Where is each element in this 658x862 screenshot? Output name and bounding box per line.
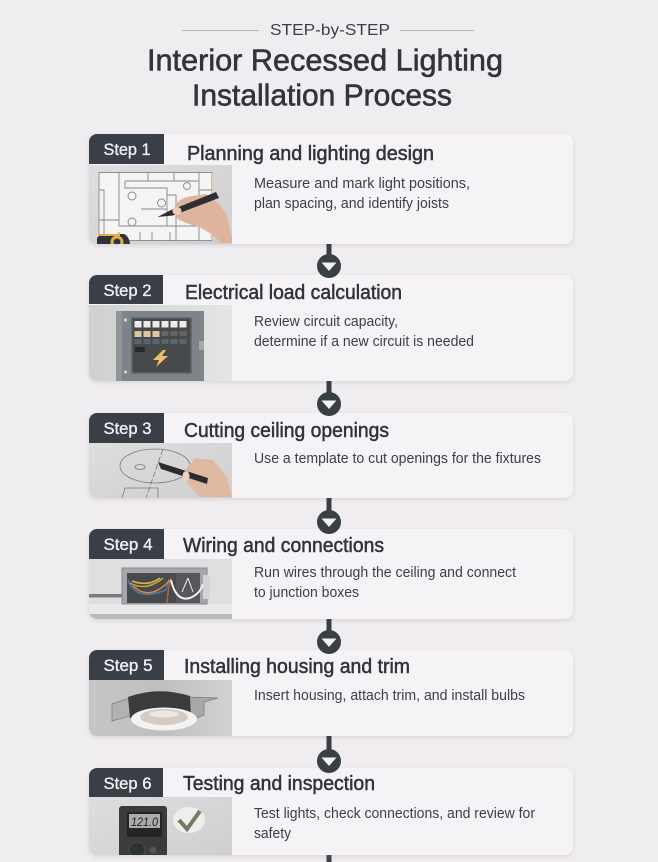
heading: Testing and inspection — [183, 773, 375, 795]
illustration: multimeter and check mark — [89, 797, 232, 858]
heading: Installing housing and trim — [184, 656, 410, 678]
description: plan spacing, and identify joists — [254, 196, 449, 212]
step tab: Step 1 — [104, 140, 150, 159]
description: Measure and mark light positions, — [254, 176, 470, 192]
arrow: step 1 to 2 — [317, 244, 341, 278]
title: Interior Recessed Lighting — [147, 42, 503, 78]
step tab: Step 6 — [104, 774, 152, 793]
heading: Cutting ceiling openings — [184, 420, 389, 442]
illustration: marking ceiling cutout — [89, 443, 232, 498]
description: determine if a new circuit is needed — [254, 334, 474, 350]
description: Insert housing, attach trim, and install bulbs — [254, 688, 525, 704]
description: Run wires through the ceiling and connect — [254, 565, 516, 581]
illustration: multimeter and check mark: 121.0 — [131, 815, 158, 829]
step tab: Step 4 — [104, 535, 152, 554]
description: Review circuit capacity, — [254, 314, 398, 330]
step tab — [89, 134, 164, 164]
description: Use a template to cut openings for the fixtures — [254, 451, 541, 467]
heading: Electrical load calculation — [185, 282, 402, 304]
description — [254, 314, 474, 350]
connector 6 — [326, 855, 332, 862]
step tab — [89, 529, 164, 559]
panel: step 5 — [89, 650, 573, 736]
step tab: Step 3 — [104, 419, 152, 438]
description: to junction boxes — [254, 585, 359, 601]
arrow: step 3 to 4 — [317, 498, 341, 534]
panel: step 2 — [89, 275, 573, 381]
panel: step 1 — [89, 134, 573, 247]
illustration: electrical panel — [89, 305, 232, 381]
panel: step 3 — [89, 413, 573, 498]
step tab — [89, 275, 163, 304]
title: Installation Process — [192, 78, 452, 112]
arrow: step 5 to 6 — [317, 736, 341, 773]
step tab — [89, 413, 164, 443]
step tab — [89, 768, 163, 797]
description — [254, 806, 535, 842]
arrow: step 4 to 5 — [317, 619, 341, 654]
illustration: junction box wiring — [89, 559, 232, 619]
step tab — [89, 650, 164, 680]
arrow: step 2 to 3 — [317, 381, 341, 416]
heading: Planning and lighting design — [187, 143, 434, 165]
illustration: floor plan and hand — [89, 165, 233, 247]
heading: Wiring and connections — [183, 535, 384, 557]
description — [254, 176, 470, 212]
description: Test lights, check connections, and review for — [254, 806, 535, 822]
header: eyebrow and title — [147, 22, 503, 112]
illustration: recessed light housing — [89, 680, 232, 736]
step tab: Step 5 — [104, 656, 152, 675]
description: safety — [254, 826, 292, 842]
step tab: Step 2 — [104, 281, 152, 300]
panel: step 6 — [89, 768, 573, 858]
eyebrow: STEP-by-STEP — [270, 22, 390, 39]
title — [147, 42, 503, 112]
panel: step 4 — [89, 529, 573, 619]
description — [254, 565, 516, 601]
